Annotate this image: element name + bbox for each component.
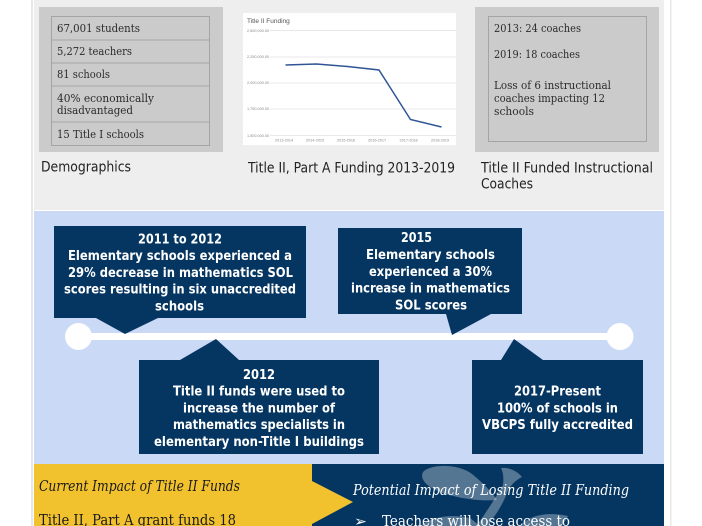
- panel: instructional coaches: schools: [494, 104, 534, 118]
- heading: current impact: Current Impact of Title II Funds: [39, 479, 240, 495]
- line chart: Title II funding: [243, 13, 456, 145]
- demographics table: 40% economically: [57, 91, 154, 105]
- callout: 2012: elementary non-Title I buildings: [154, 434, 364, 450]
- line chart: Title II funding: 2,500,000.00: [247, 29, 269, 33]
- caption: coaches: [480, 160, 653, 192]
- line chart: Title II funding: Title II Funding: [247, 18, 290, 25]
- callout: 2012: increase the number of: [183, 400, 335, 416]
- caption: coaches: Title II Funded Instructional: [480, 160, 653, 176]
- panel: potential impact of losing funding: [312, 464, 664, 526]
- callout: 2012: mathematics specialists in: [173, 417, 345, 433]
- demographics table: [52, 16, 210, 146]
- callout: 2017-Present: 2017-Present: [514, 384, 601, 400]
- demographics table: 5,272 teachers: [57, 44, 132, 58]
- demographics table: 67,001 students: [57, 21, 140, 35]
- demographics table: disadvantaged: [57, 103, 134, 117]
- line chart: Title II funding: 2015-2016: [337, 138, 355, 142]
- callout: 2011 to 2012: scores resulting in six unaccredited: [64, 282, 296, 298]
- line chart: Title II funding: 1,750,000.00: [247, 107, 269, 111]
- callout: 2015: 2015: [401, 230, 432, 246]
- panel: instructional coaches: 2019: 18 coaches: [494, 47, 580, 61]
- panel: top section: [34, 0, 664, 210]
- line chart: Title II funding: 2018-2019: [431, 138, 449, 142]
- callout: 2015: SOL scores: [395, 298, 467, 314]
- heading: potential impact: Potential Impact of Losing Title II Funding: [352, 483, 629, 499]
- callout: 2011 to 2012: 29% decrease in mathematics SOL: [68, 265, 293, 281]
- line chart: Title II funding: 2013-2014: [275, 138, 293, 142]
- callout: 2015: experienced a 30%: [369, 264, 492, 280]
- callout: 2017-Present: [472, 339, 643, 454]
- callout: 2011 to 2012: [54, 226, 306, 334]
- line chart: Title II funding: 2017-2018: [400, 138, 418, 142]
- timeline line with end circles: [65, 323, 634, 350]
- panel: demographics: [39, 7, 223, 152]
- panel: instructional coaches: Loss of 6 instructional: [494, 78, 611, 92]
- callout: 2012: Title II funds were used to: [173, 384, 345, 400]
- line chart: Title II funding: 1,500,000.00: [247, 134, 269, 138]
- demographics table: 15 Title I schools: [57, 127, 144, 141]
- callout: 2015: increase in mathematics: [351, 280, 510, 296]
- callout: 2017-Present: VBCPS fully accredited: [482, 417, 633, 433]
- demographics table: 81 schools: [57, 67, 110, 81]
- line chart: Title II funding: 2,250,000.00: [247, 55, 269, 59]
- callout: 2012: 2012: [243, 367, 275, 383]
- callout: 2015: Elementary schools: [366, 247, 495, 263]
- callout: 2017-Present: 100% of schools in: [497, 400, 618, 416]
- panel: instructional coaches: [475, 7, 659, 152]
- panel: timeline: [34, 211, 664, 464]
- callout: 2011 to 2012: Elementary schools experienced a: [68, 248, 292, 264]
- callout: 2011 to 2012: 2011 to 2012: [138, 232, 222, 248]
- line chart: Title II funding: 2,000,000.00: [247, 81, 269, 85]
- icon: faded leaf watermark: [420, 466, 568, 526]
- line chart: Title II funding: 2016-2017: [368, 138, 386, 142]
- panel: current impact of funds: [34, 464, 353, 526]
- caption: coaches: Coaches: [481, 176, 533, 192]
- panel: instructional coaches: coaches impacting 12: [494, 91, 605, 105]
- callout: 2012: [139, 339, 379, 454]
- panel: instructional coaches: 2013: 24 coaches: [494, 21, 581, 35]
- callout: 2011 to 2012: schools: [155, 298, 204, 314]
- line chart: Title II funding: 2014-2015: [306, 138, 324, 142]
- caption: funding chart: Title II, Part A Funding 2013-2019: [247, 160, 455, 176]
- caption: demographics: Demographics: [41, 160, 131, 176]
- callout: 2015: [338, 228, 522, 335]
